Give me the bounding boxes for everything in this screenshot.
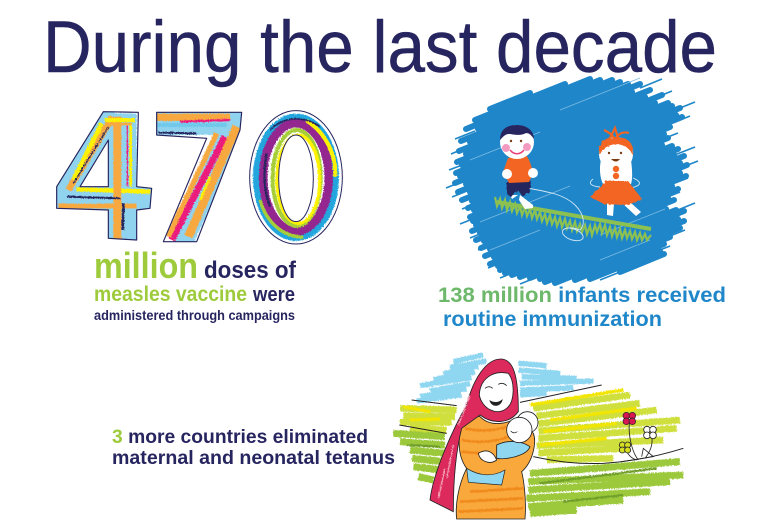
hill lines xyxy=(399,385,683,464)
digit 7 xyxy=(155,112,242,243)
crayon yellow-green fields xyxy=(400,390,680,460)
number 470 xyxy=(57,111,342,244)
caption: measles vaccine were: measles vaccine xyxy=(94,283,247,306)
caption: million doses of: million xyxy=(94,245,198,286)
skipping rope xyxy=(527,178,639,241)
digit 4 xyxy=(57,112,152,240)
caption: maternal and neonatal tetanus: maternal and neonatal tetanus xyxy=(112,448,395,469)
boy xyxy=(500,125,538,209)
panel: 470 million doses: doses of xyxy=(204,257,297,284)
caption: 3 more countries eliminated: 3 more countries eliminated xyxy=(112,427,368,448)
mother xyxy=(430,359,535,519)
digit 0 xyxy=(250,111,342,244)
grass xyxy=(495,197,651,240)
baby xyxy=(478,412,538,462)
caption: routine immunization: routine immunization xyxy=(443,308,662,331)
panel: tetanus elimination xyxy=(112,355,683,519)
girl xyxy=(590,128,642,216)
panel: 470 million doses: were xyxy=(252,284,295,306)
crayon green grass xyxy=(393,433,683,513)
panel: 470 million doses xyxy=(57,111,342,323)
illustration: blue scribble background xyxy=(446,78,698,284)
caption: 138 million infants received: 138 million infants received xyxy=(438,284,726,307)
flowers xyxy=(619,412,656,462)
caption: administered through campaigns: administered through campaigns xyxy=(94,307,295,323)
crayon sky xyxy=(417,355,593,401)
title: During the last decade xyxy=(43,7,717,88)
panel: infants immunization xyxy=(438,78,726,331)
illustration: mother and baby xyxy=(393,355,683,519)
